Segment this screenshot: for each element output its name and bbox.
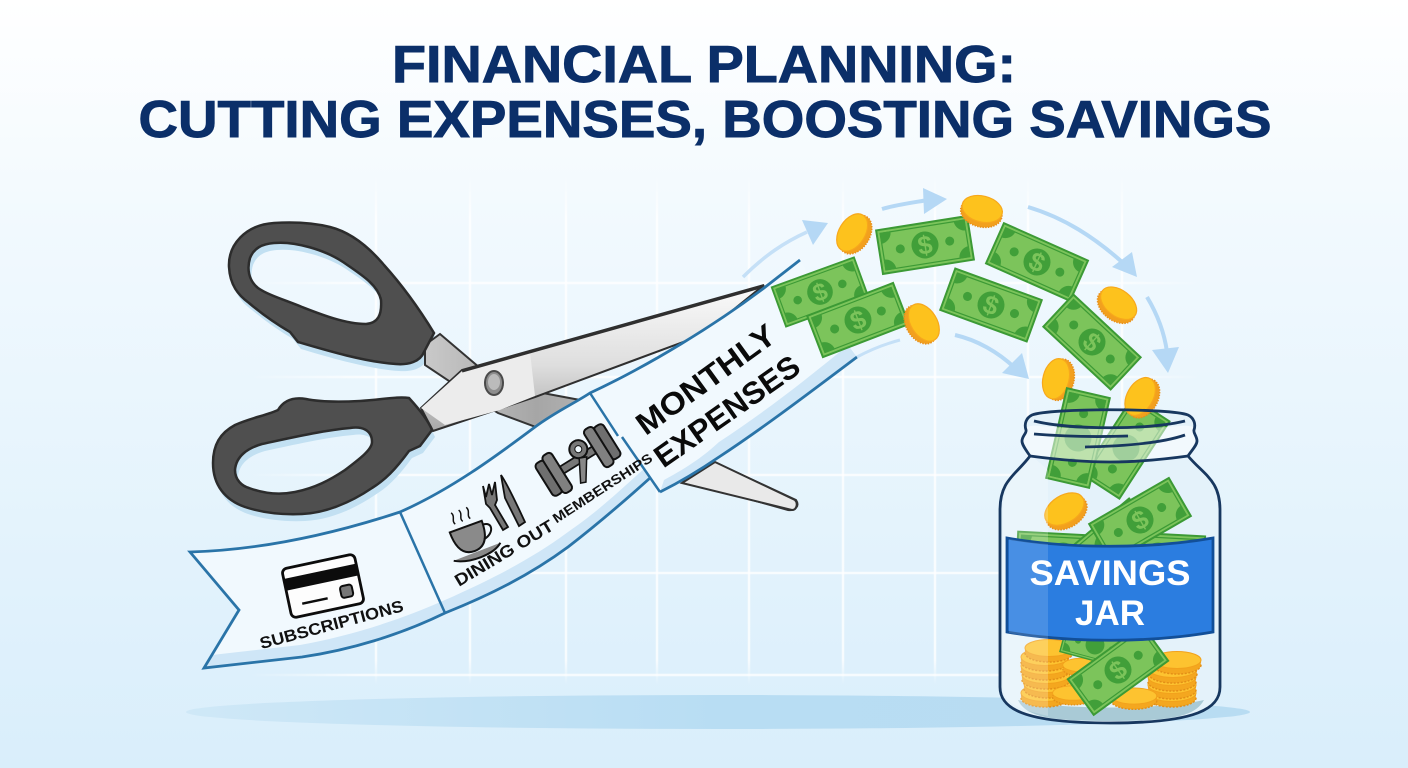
icon: fork and knife [483, 475, 525, 530]
bill 6: $ [1076, 326, 1108, 358]
bill entering right [1082, 397, 1170, 499]
bill entering left [1046, 388, 1110, 488]
bill mid right [1145, 533, 1206, 544]
bill 1 [772, 257, 868, 327]
bill 1: $ [809, 278, 832, 308]
ribbon tail [857, 340, 900, 357]
coin 2 [958, 191, 1006, 232]
jar glass sheen [1003, 456, 1048, 716]
ribbon divider left [400, 512, 445, 613]
label: subscriptions: SUBSCRIPTIONS [258, 597, 406, 653]
ground shadow [186, 695, 1250, 729]
lower handle [213, 397, 432, 514]
bill 4: $ [1024, 245, 1050, 279]
arrow 4 [1147, 297, 1179, 373]
ribbon fill [190, 260, 857, 668]
falling coin [1118, 372, 1166, 424]
arrow 2 [882, 188, 947, 214]
icon: dumbbell and key [532, 420, 624, 501]
arrow 5 [955, 335, 1029, 379]
savings jar [1000, 372, 1220, 723]
jar base tint [1018, 700, 1204, 721]
jar outline [1000, 410, 1220, 723]
coin in jar [1044, 492, 1088, 530]
bill 2 [807, 283, 909, 357]
upper handle [229, 222, 434, 364]
bills entering jar [1046, 388, 1170, 499]
label: monthly expenses: EXPENSES [647, 348, 807, 474]
upper blade [421, 285, 764, 431]
ribbon outline [190, 260, 857, 668]
ribbon [190, 260, 900, 668]
ribbon lower shade [204, 345, 857, 668]
jar label: JAR [1075, 594, 1145, 633]
label: memberships: MEMBERSHIPS [550, 450, 655, 526]
bottom bill [1066, 640, 1170, 716]
jar label: SAVINGS [1030, 554, 1190, 593]
bill mid back [1016, 530, 1086, 544]
right coin stack [1148, 652, 1201, 707]
coin 1 [830, 208, 879, 260]
title [138, 36, 1272, 149]
bill 3 [876, 216, 974, 274]
scissors [213, 222, 797, 521]
arrow 1 [743, 220, 828, 277]
flow arrows [743, 188, 1179, 379]
coin 3 [897, 298, 946, 350]
coin 4 [1091, 280, 1143, 330]
label: monthly expenses: MONTHLY [629, 317, 783, 442]
left coin stack [1021, 640, 1073, 707]
coin behind bill [1062, 658, 1092, 676]
jar rim glass [1022, 426, 1197, 462]
bill 3: $ [916, 229, 935, 261]
bottom coins [1053, 686, 1157, 709]
bill 5: $ [979, 288, 1003, 322]
bill 4 [986, 223, 1088, 301]
arrow 3 [1028, 207, 1137, 277]
bill mid [1074, 497, 1146, 545]
bill 6 [1043, 295, 1141, 389]
bottom bill: $ [1103, 653, 1133, 686]
bill mid front: $ [1126, 503, 1154, 537]
pivot screw [485, 371, 503, 395]
bill mid front [1088, 476, 1192, 545]
bottom back bill [1059, 640, 1118, 661]
jar label [1007, 538, 1213, 640]
ribbon divider right [590, 393, 660, 492]
title: CUTTING EXPENSES, BOOSTING SAVINGS [138, 91, 1272, 149]
icon: credit card [282, 554, 364, 618]
label: dining out: DINING OUT [451, 516, 558, 590]
title: FINANCIAL PLANNING: [392, 36, 1016, 94]
background grid [250, 175, 1200, 685]
icon: coffee cup [438, 500, 503, 566]
lower blade [425, 334, 797, 510]
bill 2: $ [846, 303, 871, 337]
jar contents [1016, 478, 1205, 715]
label: monthly expenses [629, 317, 807, 474]
jar glass back [1000, 410, 1220, 723]
flying cash [772, 208, 1141, 389]
coin 5 [1038, 355, 1079, 403]
bill 5 [940, 269, 1042, 341]
scissors shadow [216, 229, 437, 521]
